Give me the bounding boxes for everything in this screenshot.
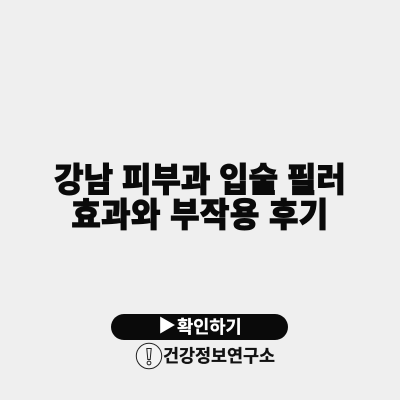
button: 확인하기: 확인하기 bbox=[177, 317, 242, 337]
icon: exclamation circle bbox=[136, 342, 162, 370]
button: 확인하기: ▶ bbox=[158, 316, 176, 336]
brand label: 건강정보연구소 bbox=[163, 346, 275, 366]
button: 확인하기 bbox=[111, 314, 288, 340]
title: 강남 피부과 입술 필러 bbox=[54, 161, 346, 199]
title bbox=[54, 161, 346, 234]
title: 효과와 부작용 후기 bbox=[71, 196, 329, 234]
